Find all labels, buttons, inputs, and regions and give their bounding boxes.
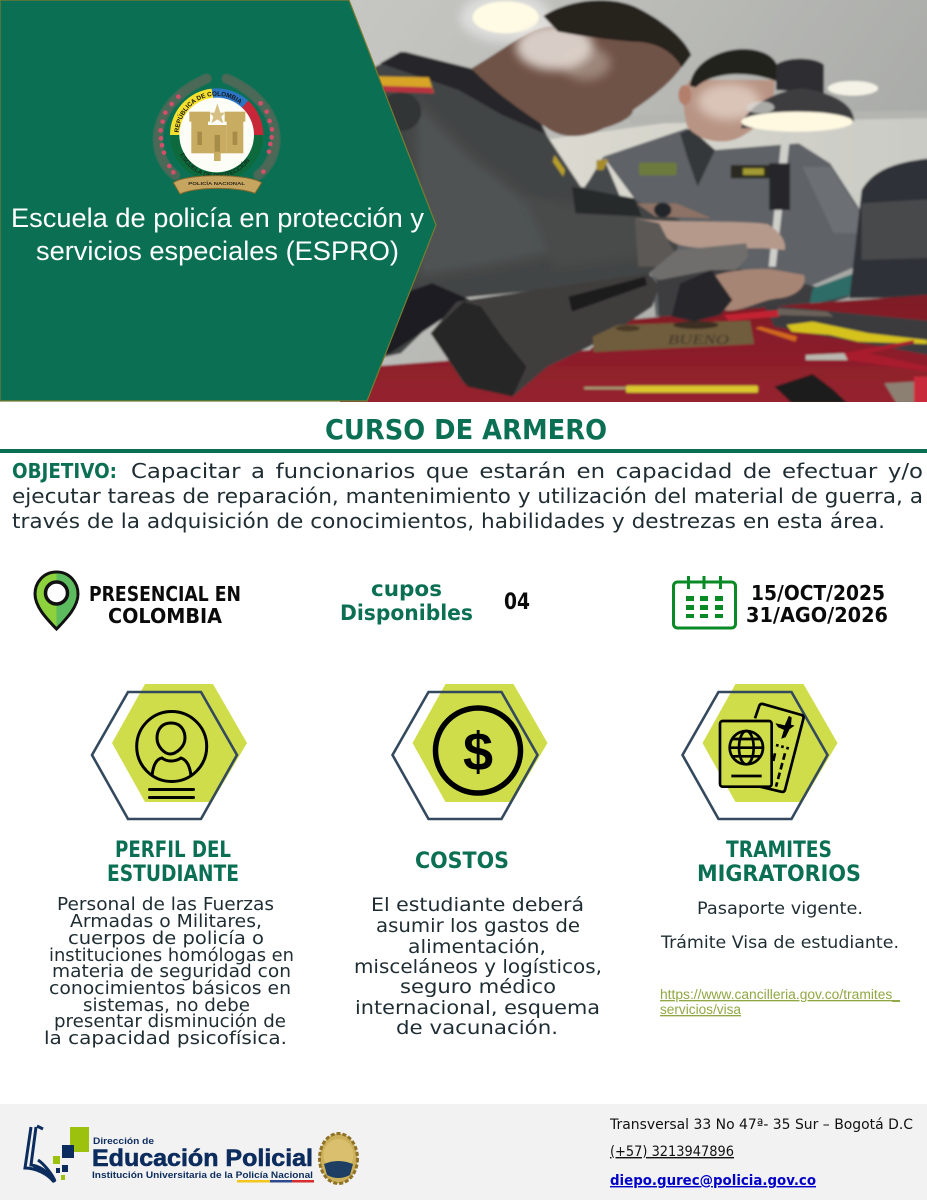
visa link: servicios/visa bbox=[660, 1002, 741, 1017]
description: Trámite Visa de estudiante. bbox=[660, 933, 899, 953]
logo: Dirección de Educación Policial bbox=[25, 1126, 314, 1182]
course dates bbox=[746, 581, 888, 627]
icon: hexagons with person bbox=[92, 684, 247, 819]
heading: COSTOS bbox=[415, 849, 509, 874]
photo: armourers working on a rifle bbox=[324, 0, 927, 423]
description bbox=[354, 894, 602, 1039]
footer band bbox=[0, 1104, 927, 1200]
description: cuerpos de policía o bbox=[68, 928, 264, 949]
logo: Dirección de Educación Policial: Institución Universitaria de la Policía Nacional bbox=[92, 1170, 313, 1181]
icon: hexagons with dollar coin bbox=[392, 684, 548, 819]
description: El estudiante deberá bbox=[371, 894, 584, 916]
description: seguro médico bbox=[400, 976, 556, 998]
available seats: 04 bbox=[504, 590, 530, 615]
objective text: través de la adquisición de conocimientos, habilidades y destrezas en esta área. bbox=[12, 509, 885, 533]
person at right edge bbox=[849, 157, 927, 298]
wooden stand bbox=[593, 321, 754, 352]
coloured ring bbox=[170, 88, 263, 182]
objective text: ejecutar tareas de reparación, mantenimiento y utilización del material de guerra, a bbox=[12, 484, 923, 508]
seal: accreditation bbox=[320, 1134, 358, 1184]
modality label: PRESENCIAL EN bbox=[89, 582, 241, 606]
course dates: 15/OCT/2025 bbox=[751, 581, 885, 605]
school name: Escuela de policía en protección y bbox=[11, 203, 425, 233]
visa link bbox=[660, 987, 900, 1017]
course title: CURSO DE ARMERO bbox=[325, 413, 607, 446]
contact details: (+57) 3213947896 bbox=[610, 1144, 734, 1160]
heading: TRAMITES bbox=[726, 838, 832, 863]
castle bbox=[189, 103, 245, 161]
description: instituciones homólogas en bbox=[49, 945, 294, 966]
contact details: Transversal 33 No 47ª- 35 Sur – Bogotá D.C bbox=[609, 1117, 913, 1133]
description bbox=[44, 894, 294, 1049]
description: sistemas, no debe bbox=[83, 995, 250, 1016]
description: asumir los gastos de bbox=[376, 915, 580, 937]
objective text: Capacitar a funcionarios que estarán en capacidad de efectuar y/o bbox=[131, 459, 923, 483]
panel: costos bbox=[354, 684, 602, 1039]
emblem: Escuela de Protección crest: POLICÍA NACIONAL bbox=[188, 179, 245, 187]
heading: ESTUDIANTE bbox=[107, 862, 239, 887]
description: materia de seguridad con bbox=[52, 961, 291, 982]
icon: hexagons with dollar coin: $ bbox=[463, 722, 493, 782]
green title panel bbox=[0, 0, 436, 401]
man in the background bbox=[575, 49, 870, 320]
book mark bbox=[25, 1126, 55, 1182]
heading bbox=[107, 838, 239, 887]
description: misceláneos y logísticos, bbox=[354, 956, 602, 978]
logo: Dirección de Educación Policial: Dirección de bbox=[93, 1136, 154, 1147]
lamp bbox=[741, 59, 854, 267]
available seats bbox=[340, 577, 530, 625]
icon: calendar bbox=[674, 576, 736, 628]
available seats: Disponibles bbox=[340, 601, 473, 625]
description: Armadas o Militares, bbox=[70, 911, 262, 932]
contact details: diepo.gurec@policia.gov.co bbox=[610, 1173, 816, 1189]
heading bbox=[697, 838, 861, 887]
description: de vacunación. bbox=[396, 1017, 558, 1039]
panel: perfil del estudiante bbox=[44, 684, 294, 1049]
description: internacional, esquema bbox=[355, 997, 600, 1019]
description bbox=[660, 899, 899, 953]
description: presentar disminución de bbox=[54, 1011, 286, 1032]
objective text: OBJETIVO: bbox=[12, 459, 117, 483]
heading: PERFIL DEL bbox=[115, 838, 231, 863]
modality label bbox=[89, 582, 241, 628]
hands bbox=[635, 203, 805, 311]
contact details bbox=[609, 1117, 913, 1189]
logo: Dirección de Educación Policial: Educación Policial bbox=[92, 1145, 313, 1172]
table bbox=[340, 293, 927, 402]
school name: servicios especiales (ESPRO) bbox=[36, 236, 399, 266]
description: alimentación, bbox=[408, 936, 546, 958]
ribbon bbox=[173, 176, 262, 194]
description: Personal de las Fuerzas bbox=[57, 894, 274, 915]
objective text bbox=[12, 459, 923, 533]
tools bbox=[584, 305, 927, 403]
visa link: https://www.cancilleria.gov.co/tramites_ bbox=[660, 987, 900, 1002]
icon: hexagons with passport and ticket bbox=[682, 684, 838, 819]
course dates: 31/AGO/2026 bbox=[746, 603, 888, 627]
school name bbox=[11, 203, 425, 266]
description: conocimientos básicos en bbox=[49, 978, 291, 999]
rifle bbox=[431, 243, 748, 397]
available seats: cupos bbox=[371, 577, 442, 601]
description: Pasaporte vigente. bbox=[697, 899, 863, 919]
foreground man's head bbox=[471, 0, 691, 136]
ceiling and wall bbox=[350, 0, 927, 368]
man in the foreground bbox=[375, 50, 680, 358]
panel: tramites migratorios bbox=[660, 684, 900, 1017]
wooden stand: BUENO bbox=[668, 332, 730, 348]
ring lettering: REPÚBLICA DE COLOMBIA bbox=[174, 91, 242, 132]
modality label: COLOMBIA bbox=[108, 604, 222, 628]
description: la capacidad psicofísica. bbox=[44, 1028, 287, 1049]
heading: MIGRATORIOS bbox=[697, 862, 861, 887]
emblem: Escuela de Protección crest: ESCUELA DE PROTECCIÓN bbox=[180, 152, 250, 176]
laurel wreath bbox=[158, 78, 275, 175]
emblem: Escuela de Protección crest bbox=[152, 73, 281, 195]
icon: location pin bbox=[35, 572, 78, 629]
